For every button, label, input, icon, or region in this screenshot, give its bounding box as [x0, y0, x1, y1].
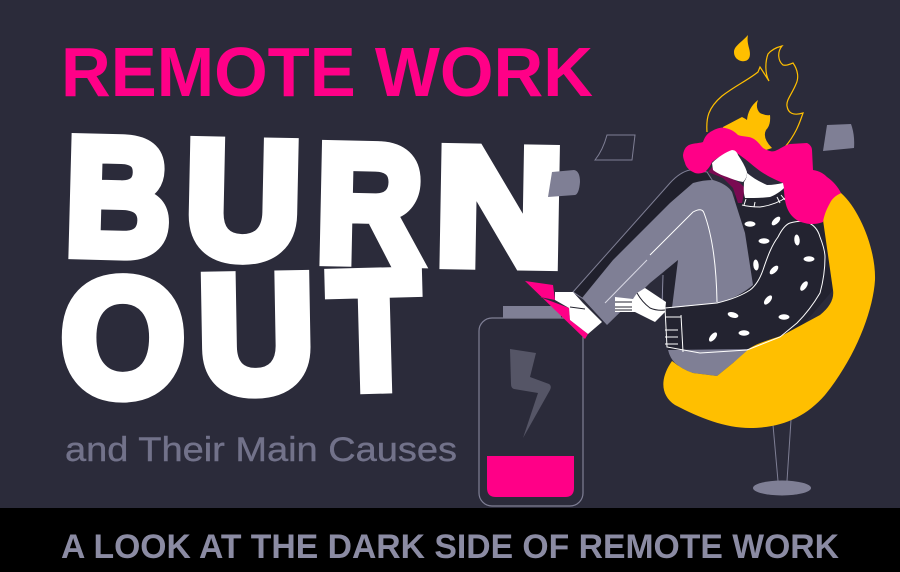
paper scrap right [823, 124, 854, 151]
flame [707, 35, 803, 152]
sweater dots [707, 215, 814, 343]
chair seat [663, 193, 875, 428]
legs [582, 180, 753, 325]
bottom banner [0, 508, 900, 572]
paper scrap near letter N [548, 170, 580, 197]
headline: burn out: B [63, 103, 173, 292]
sweater [662, 190, 833, 352]
headline: burn out: O [61, 246, 185, 431]
hand [615, 288, 666, 322]
dark hair shadow [708, 167, 745, 203]
hair [683, 128, 841, 224]
headline: burn out: R [314, 111, 425, 298]
headline: burn out: T [327, 238, 422, 425]
shoe [525, 281, 602, 339]
headline: burn out: N [433, 113, 566, 301]
face [712, 150, 784, 198]
headline: burn out: U [196, 240, 316, 428]
headline: burn out: U [183, 106, 303, 294]
back leg shadow [573, 170, 725, 310]
sweater grey hem [668, 349, 750, 376]
subtitle: and Their Main Causes [65, 431, 457, 469]
sweater and garment lines [605, 195, 825, 353]
paper scrap outline [595, 135, 635, 160]
bottom banner: A LOOK AT THE DARK SIDE OF REMOTE WORK [61, 528, 839, 566]
chair base and legs [753, 420, 811, 496]
battery [479, 306, 583, 506]
headline: burn out [61, 103, 566, 431]
title: remote work: REMOTE WORK [61, 33, 593, 111]
